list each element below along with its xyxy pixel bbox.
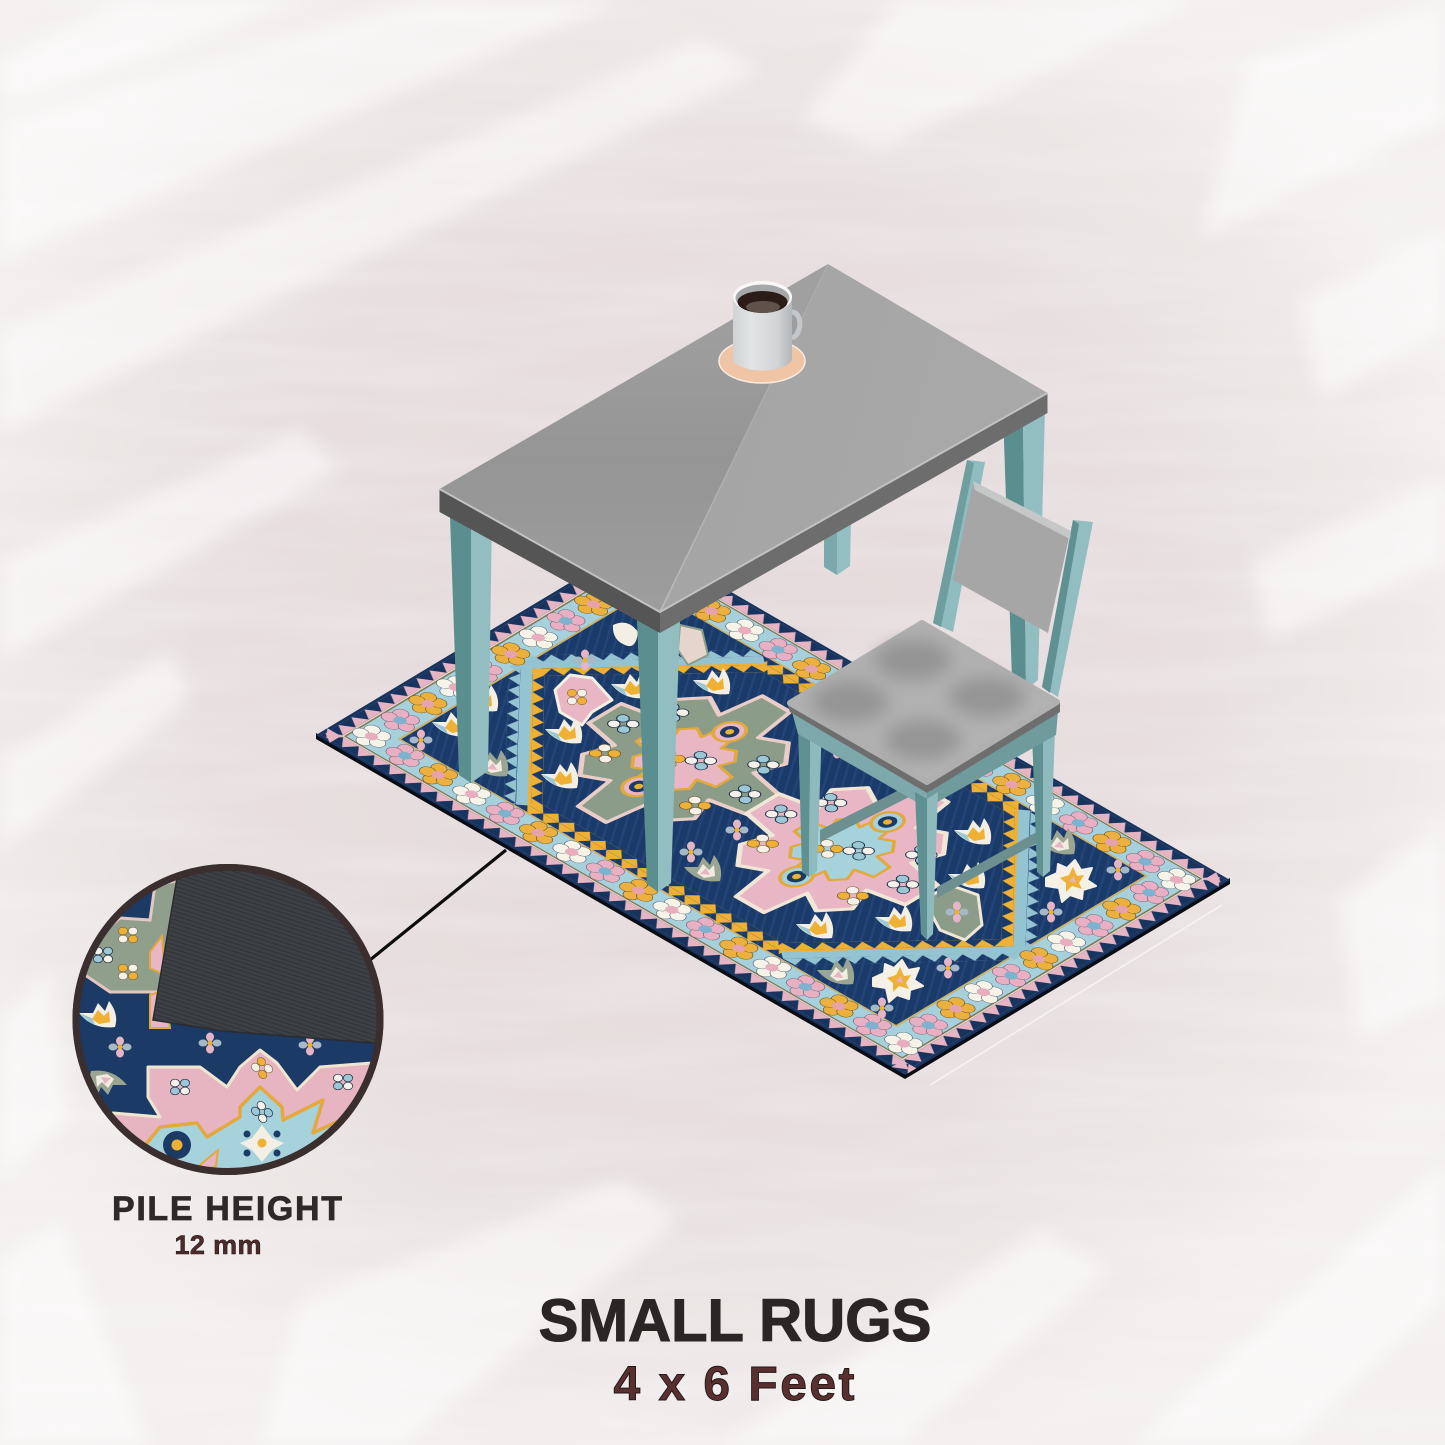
seat top with cushion shadows <box>790 623 1057 782</box>
table side right <box>660 393 1048 633</box>
folded rug backing <box>153 865 381 1043</box>
green medallion fragment <box>86 880 176 994</box>
pile height label: PILE HEIGHT <box>112 1190 342 1228</box>
chair backrest <box>953 481 1071 633</box>
pale motif under table corner <box>613 623 638 646</box>
coffee mug on coaster <box>719 281 805 383</box>
title: SMALL RUGS <box>538 1287 932 1354</box>
pink medallion fragment <box>112 1048 370 1143</box>
chair left stretcher <box>820 783 913 842</box>
pink badge ornament <box>555 675 612 725</box>
green badge ornament <box>932 885 982 940</box>
table top facet left <box>440 264 828 612</box>
hexagonal field frame <box>386 581 1160 1034</box>
tulip fragments <box>79 1001 116 1027</box>
chair apron rails <box>792 712 1058 808</box>
chair right stretcher <box>937 832 1037 898</box>
seat underside <box>787 702 1060 793</box>
pile height label <box>112 1190 342 1260</box>
back left leg <box>824 520 851 575</box>
chair <box>787 460 1093 940</box>
table side left <box>440 489 660 633</box>
chair back right post <box>1042 520 1093 697</box>
title <box>538 1287 932 1411</box>
white centre flower <box>240 1125 284 1162</box>
green medallion <box>513 658 855 860</box>
table <box>440 264 1048 892</box>
rug surface pattern (isometric) <box>316 540 1230 1075</box>
rug thick black edge <box>316 733 1230 1079</box>
pile height detail circle <box>75 865 381 1172</box>
blue inner star <box>147 1087 347 1170</box>
pile height label: 12 mm <box>174 1230 262 1260</box>
chair left leg <box>798 725 822 877</box>
table top facet right <box>660 264 1048 612</box>
chair front leg <box>915 792 938 940</box>
rug <box>316 540 1230 1085</box>
border flowers <box>344 557 1202 1060</box>
rug field ornaments <box>410 623 1130 1018</box>
front centre leg <box>637 620 680 892</box>
chair back left post <box>933 460 985 632</box>
title: 4 x 6 Feet <box>614 1358 855 1411</box>
back right leg <box>1003 408 1045 690</box>
pink medallion <box>671 748 1013 950</box>
front left leg <box>450 516 492 783</box>
chair right leg <box>1032 730 1055 877</box>
callout connector line <box>370 850 506 960</box>
